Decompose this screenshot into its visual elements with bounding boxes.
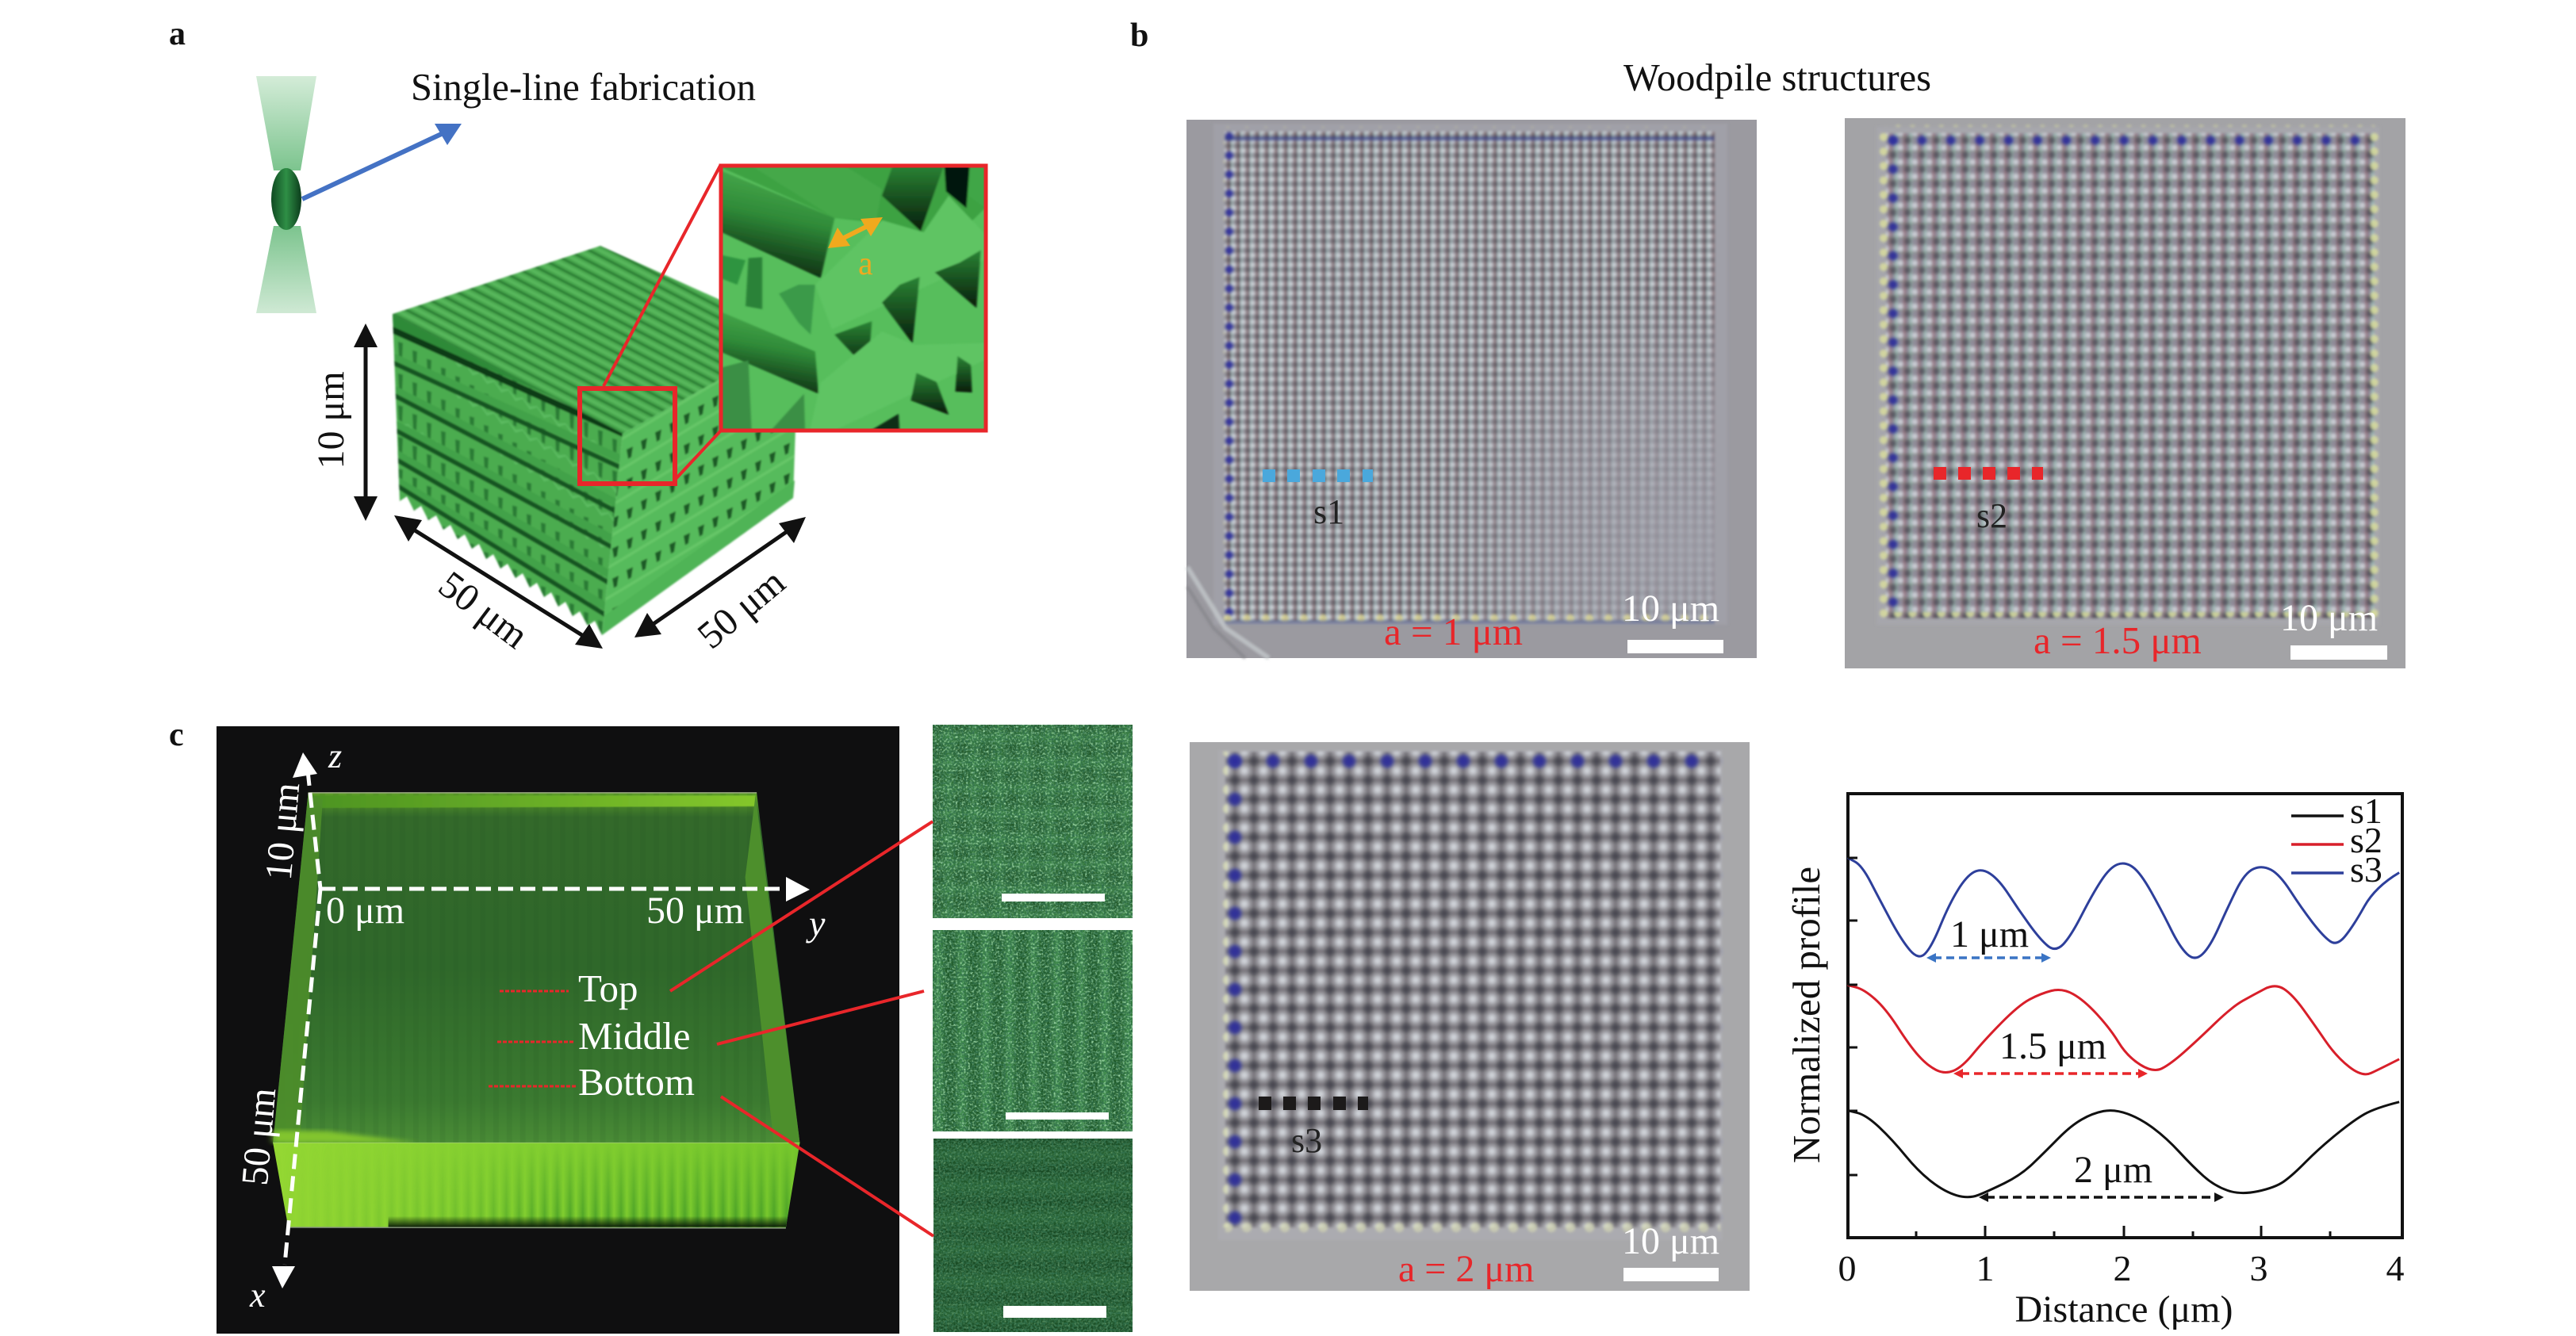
period annotation 2 um: 2 μm [2074, 1149, 2152, 1191]
layer labels: Top [578, 967, 638, 1010]
axis labels: 50 μm [646, 890, 744, 932]
axis labels: 10 μm [258, 781, 308, 882]
line from zoom box to inset [604, 166, 720, 479]
bright back edge [314, 795, 756, 808]
curve s1 [1848, 1102, 2399, 1197]
layer labels [578, 967, 695, 1104]
heading: single-line fabrication: Single-line fabrication [411, 67, 756, 109]
bright lower glow [273, 1131, 419, 1143]
right face [602, 335, 799, 635]
micrograph: a = 1.5 um: s2 [1976, 496, 2007, 535]
legend: s3 [2350, 849, 2382, 890]
micrograph: a = 2 um [1190, 742, 1750, 1291]
micrograph: a = 2 um: 10 μm [1622, 1220, 1719, 1262]
x tick labels: 0 [1838, 1248, 1856, 1288]
x tick labels: 4 [2386, 1248, 2405, 1288]
red connector lines [670, 821, 933, 1236]
icon: laser beam focus [256, 76, 316, 313]
top face ridges [393, 246, 799, 434]
curve s3 [1848, 858, 2399, 958]
inset: magnified woodpile [715, 165, 993, 434]
axis labels: x [249, 1276, 266, 1315]
layer labels: Bottom [578, 1060, 695, 1104]
label 10 um: 10 μm [310, 371, 352, 469]
slice image: bottom [933, 1139, 1133, 1332]
arrow: fabrication direction [302, 124, 462, 199]
dimension: 50 um left [394, 515, 603, 649]
curve s2 [1848, 985, 2399, 1074]
orange double arrow a [828, 217, 883, 248]
axis labels: z [328, 737, 342, 775]
legend [2291, 790, 2382, 890]
micrograph: a = 1 um [1186, 120, 1757, 658]
label 50 um right: 50 μm [689, 560, 793, 657]
line chart: normalized profile [1784, 790, 2405, 1330]
legend: s1 [2350, 790, 2382, 831]
label a: a [169, 16, 186, 52]
label orange a: a [858, 246, 873, 282]
x tick labels: 3 [2249, 1248, 2268, 1288]
legend: s2 [2350, 820, 2382, 860]
bright right edge [746, 795, 799, 1143]
slice image: top [933, 725, 1133, 918]
woodpile block [381, 246, 799, 642]
small red selection box [580, 389, 675, 484]
micrograph: a = 2 um: s3 [1291, 1121, 1322, 1160]
micrograph: a = 1 um: a = 1 μm [1384, 610, 1523, 653]
dimension: 50 um right [634, 517, 806, 637]
period annotation 2 um [1979, 1149, 2224, 1202]
y axis title: Normalized profile [1784, 867, 1828, 1163]
axis labels: 50 μm [234, 1086, 284, 1187]
label 50 um left: 50 μm [431, 562, 537, 657]
slice image: middle [933, 930, 1133, 1131]
label b: b [1130, 17, 1148, 54]
micrograph: a = 1.5 um: 10 μm [2280, 597, 2378, 639]
micrograph: a = 1.5 um [1845, 118, 2405, 668]
left face [391, 313, 623, 636]
x axis title: Distance (μm) [2015, 1288, 2233, 1330]
period annotation 1.5 um [1953, 1025, 2148, 1078]
panel c: 3D confocal image [217, 726, 899, 1334]
period annotation 1.5 um: 1.5 μm [1999, 1025, 2106, 1067]
micrograph: a = 1 um: 10 μm [1622, 588, 1719, 630]
x tick labels: 2 [2113, 1248, 2132, 1288]
green block top [273, 793, 799, 1143]
period annotation 1 um: 1 μm [1950, 913, 2029, 955]
red dashed level markers [489, 991, 577, 1086]
axis labels: 0 μm [326, 890, 404, 932]
scratch [1187, 567, 1269, 658]
axis ticks [1848, 858, 2330, 1238]
axis labels [234, 737, 826, 1315]
axes frame [1848, 794, 2402, 1238]
axis labels: y [806, 903, 826, 944]
dimension: 10 um vertical [354, 323, 378, 521]
period annotation 1 um [1926, 913, 2051, 963]
front face [273, 1143, 799, 1227]
micrograph: a = 1 um: s1 [1313, 492, 1344, 531]
axes [285, 771, 785, 1265]
micrograph: a = 1.5 um: a = 1.5 μm [2034, 618, 2202, 662]
layer labels: Middle [578, 1014, 691, 1058]
heading: woodpile structures: Woodpile structures [1623, 57, 1931, 99]
profile marker s3 [1259, 1097, 1368, 1110]
x tick labels [1838, 1248, 2405, 1288]
micrograph: a = 2 um: a = 2 μm [1398, 1248, 1534, 1290]
profile marker s1 [1263, 469, 1373, 482]
profile marker s2 [1934, 467, 2043, 480]
x tick labels: 1 [1976, 1248, 1994, 1288]
bright left edge [273, 793, 323, 1143]
label c: c [169, 717, 184, 753]
